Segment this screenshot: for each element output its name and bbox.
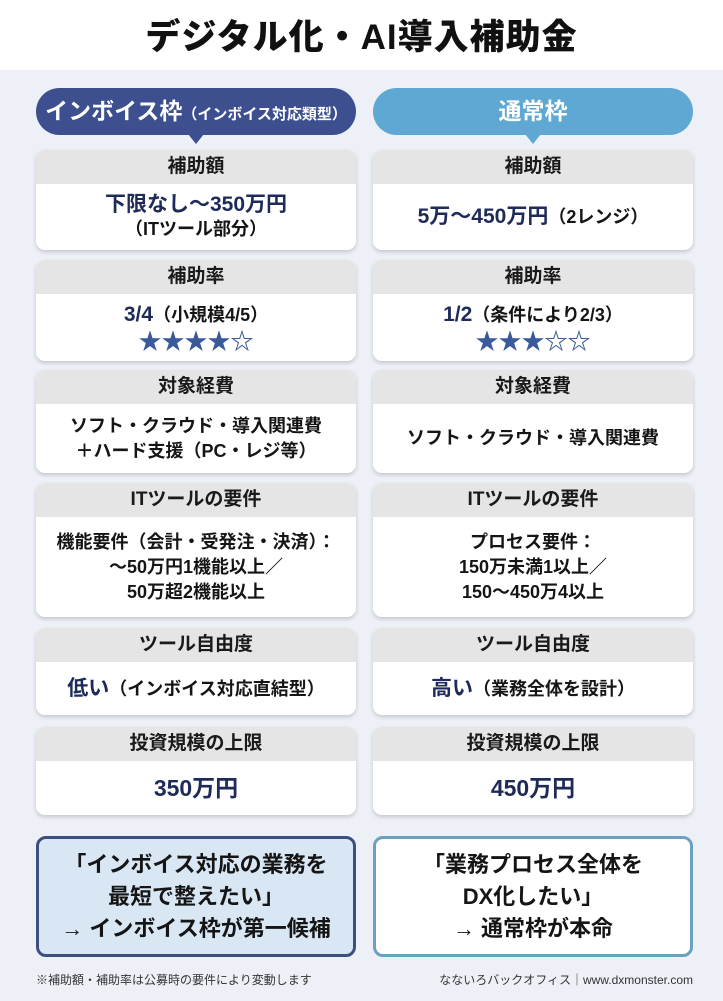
card: right freedom: ツール自由度 <box>476 634 590 655</box>
card: right IT requirements: 150万未満1以上／ <box>459 556 607 576</box>
card: right expenses: ソフト・クラウド・導入関連費 <box>407 428 659 448</box>
header: standard: 通常枠 <box>498 98 568 124</box>
card: left amount: 補助額 <box>167 156 224 177</box>
card: left investment cap <box>36 727 356 815</box>
card: left expenses: ＋ハード支援（PC・レジ等） <box>75 440 316 460</box>
card: right IT requirements: プロセス要件： <box>470 532 596 552</box>
callout: invoice recommendation <box>36 836 356 957</box>
card: left investment cap: 投資規模の上限 <box>129 733 262 754</box>
card: left IT requirements: ITツールの要件 <box>131 489 261 510</box>
card: right rate: 1/2（条件により2/3） <box>443 302 623 326</box>
card: right rate <box>373 260 693 361</box>
card: right rate: ★★★☆☆ <box>476 328 590 354</box>
card: left freedom <box>36 628 356 715</box>
card: right IT requirements <box>373 483 693 617</box>
callout: invoice recommendation: 最短で整えたい」 <box>108 884 284 908</box>
card: left rate: 3/4（小規模4/5） <box>124 302 268 326</box>
card: right freedom <box>373 628 693 715</box>
card: left expenses <box>36 370 356 473</box>
card: left rate <box>36 260 356 361</box>
card: left freedom: ツール自由度 <box>139 634 253 655</box>
callout: invoice recommendation: → インボイス枠が第一候補 <box>61 916 331 940</box>
card: left IT requirements: 50万超2機能以上 <box>127 582 265 602</box>
callout: standard recommendation <box>373 836 693 957</box>
card: right amount: 5万〜450万円（2レンジ） <box>418 205 648 228</box>
title: デジタル化・AI導入補助金 <box>145 18 578 57</box>
card: right investment cap: 450万円 <box>491 774 575 800</box>
card: left amount <box>36 150 356 250</box>
card: right IT requirements: ITツールの要件 <box>468 489 598 510</box>
card: left expenses: 対象経費 <box>158 376 234 397</box>
card: left amount: （ITツール部分） <box>125 219 267 239</box>
card: left IT requirements <box>36 483 356 617</box>
card: right rate: 補助率 <box>504 266 562 287</box>
callout: standard recommendation: 「業務プロセス全体を <box>423 852 643 876</box>
header: standard <box>373 88 693 135</box>
credit: なないろバックオフィス｜www.dxmonster.com <box>439 973 693 987</box>
card: right expenses <box>373 370 693 473</box>
card: right IT requirements: 150〜450万4以上 <box>462 582 604 602</box>
callout: standard recommendation: DX化したい」 <box>463 884 603 908</box>
callout: invoice recommendation: 「インボイス対応の業務を <box>64 852 328 876</box>
card: left expenses: ソフト・クラウド・導入関連費 <box>70 416 322 436</box>
callout: standard recommendation: → 通常枠が本命 <box>453 916 613 940</box>
card: left IT requirements: 〜50万円1機能以上／ <box>109 556 283 576</box>
card: right amount <box>373 150 693 250</box>
card: right freedom: 高い（業務全体を設計） <box>431 676 635 700</box>
card: left IT requirements: 機能要件（会計・受発注・決済）： <box>56 532 336 552</box>
footnote: ※補助額・補助率は公募時の要件により変動します <box>36 973 312 987</box>
card: right investment cap: 投資規模の上限 <box>466 733 600 754</box>
card: left investment cap: 350万円 <box>154 774 238 800</box>
header: invoice <box>36 88 356 135</box>
card: left rate: ★★★★☆ <box>138 328 254 354</box>
card: right amount: 補助額 <box>504 156 562 177</box>
card: right investment cap <box>373 727 693 815</box>
card: left amount: 下限なし〜350万円 <box>105 193 287 216</box>
header: invoice: インボイス枠（インボイス対応類型） <box>45 98 347 124</box>
card: left rate: 補助率 <box>167 266 224 287</box>
card: left freedom: 低い（インボイス対応直結型） <box>67 676 325 700</box>
card: right expenses: 対象経費 <box>495 376 571 397</box>
